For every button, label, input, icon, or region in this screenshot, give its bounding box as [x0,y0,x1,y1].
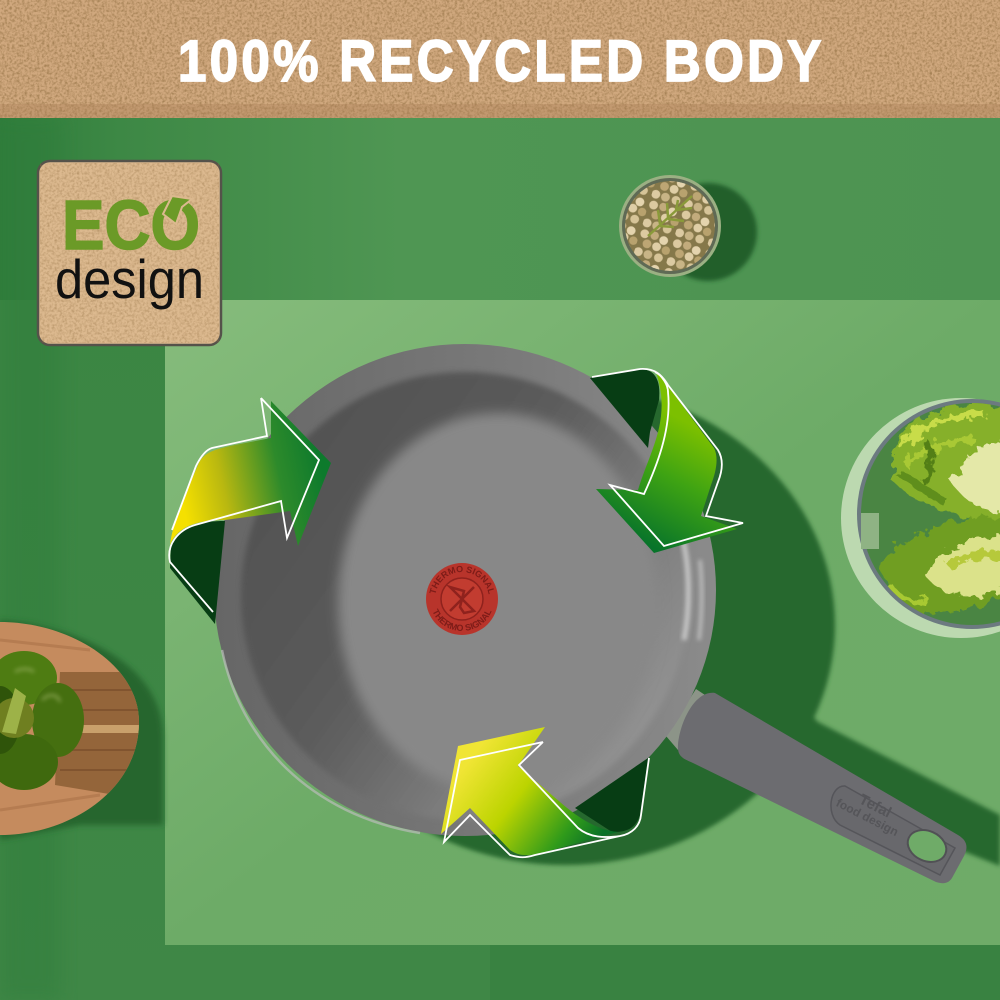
arrow: bottom recycling arrow [441,727,649,857]
handle: grey pan handle [666,689,966,883]
peppercorn bowl [619,175,757,281]
frying pan [216,344,716,836]
shadow: pan and handle [295,385,1000,866]
thermo spot lettering: THERMO SIGNAL [433,608,492,631]
thermo signal spot [426,563,498,635]
shadow: peppercorn bowl [659,183,757,281]
handle logo: Tefal [856,791,894,821]
badge word: ECO: ECO [62,186,200,264]
thermo spot lettering [429,566,494,631]
badge: ECO design [38,161,221,345]
pepper highlights [15,669,60,702]
handle collar [666,689,708,750]
board [0,620,145,840]
thermo spot lettering: THERMO SIGNAL [429,566,494,594]
cutting board with pepper [0,620,163,840]
pan flat base [338,413,658,793]
lettuce half: bottom [878,516,1000,613]
arrow outline [169,398,319,612]
badge word: design: design [55,248,204,310]
shadow: board [0,620,163,840]
arrow: left recycling arrow [169,398,331,624]
green pepper [0,651,84,790]
title: 100% RECYCLED BODY [178,29,821,94]
highlight: right rim [683,540,702,640]
handle body [678,693,966,883]
handle logo: food design [834,796,901,839]
handle recess [831,786,955,875]
panel: lighter green sheet [165,300,1000,945]
lettuce half: top [893,403,1000,521]
handle logo [834,782,908,839]
arrow outline [444,742,649,857]
handle hole [903,824,951,868]
arrow: upper right recycling arrow [590,369,743,553]
arrow outline [592,369,743,546]
hourglass icon [450,587,474,613]
rosemary sprig [648,196,692,236]
peppercorns [625,181,715,271]
lettuce bowl [841,398,1000,638]
pan rim [214,344,716,836]
header band: kraft paper [0,0,1000,118]
bowl outer ring [841,398,1000,638]
icon: recycle arrow on O [163,196,192,224]
pan inner wall [241,372,689,820]
